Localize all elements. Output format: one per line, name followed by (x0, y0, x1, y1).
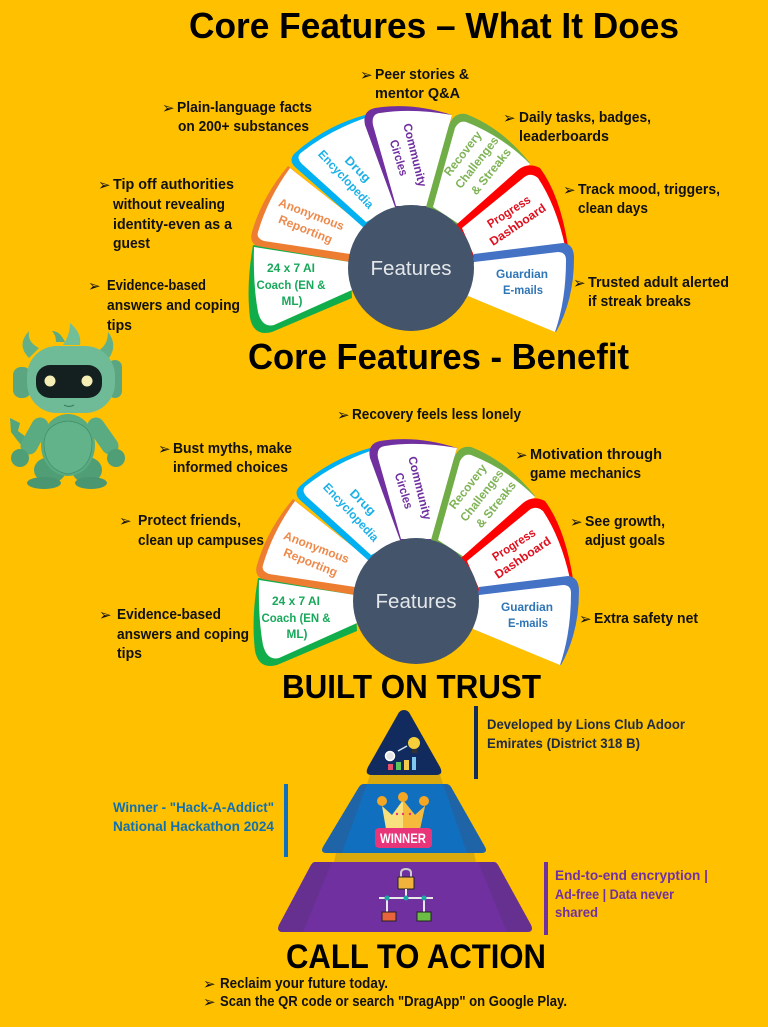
trust note: privacy: Ad-free | Data never (555, 887, 675, 902)
segment: recovery challenges and streaks (431, 447, 535, 559)
callout: anonymous reporting (119, 512, 264, 549)
callout: guardian e-mails (573, 274, 729, 310)
icon: winner crown: WINNER (380, 830, 426, 846)
segment: progress dashboard (456, 165, 568, 262)
icon: green robot mascot (10, 323, 125, 489)
segment: drug encyclopedia (296, 448, 401, 561)
callout: AI coach: Evidence-based (117, 607, 221, 623)
callout: progress dashboard: ➢ (563, 181, 576, 199)
icon: padlock network (379, 869, 433, 921)
segment: recovery challenges and streaks: Recovery (441, 128, 485, 179)
segment: anonymous reporting: Anonymous (277, 195, 346, 233)
segment: guardian e-mails (473, 576, 579, 665)
icon: idea chart (386, 737, 420, 770)
hub circle: features: Features (376, 591, 456, 613)
call to action list: ➢ (203, 993, 216, 1011)
callout: progress dashboard: adjust goals (585, 533, 665, 549)
callout: drug encyclopedia: ➢ (162, 99, 175, 117)
callout: progress dashboard (563, 181, 720, 217)
segment: anonymous reporting (251, 166, 366, 262)
callout: AI coach: tips (107, 318, 132, 334)
callout: AI coach (99, 606, 249, 662)
segment: anonymous reporting (256, 499, 371, 595)
callout: community circles: Recovery feels less lonely (352, 407, 521, 423)
segment: 24x7 AI coach (249, 245, 352, 333)
segment: drug encyclopedia: Encyclopedia (320, 480, 382, 545)
trust note: developer: Developed by Lions Club Adoor (487, 717, 686, 732)
callout: anonymous reporting: ➢ (98, 176, 111, 194)
trust note: hackathon winner: Winner - "Hack-A-Addict" (113, 800, 274, 815)
fan diagram: features (249, 106, 574, 333)
pyramid (278, 710, 532, 932)
segment: community circles: Community (400, 122, 430, 189)
segment: 24x7 AI coach: Coach (EN & (262, 611, 331, 625)
callout: anonymous reporting: without revealing (112, 197, 225, 213)
callout: community circles: ➢ (360, 66, 373, 84)
segment: 24x7 AI coach (254, 578, 357, 666)
trust note: developer (474, 706, 686, 779)
segment: guardian e-mails: Guardian (501, 600, 553, 614)
callout: drug encyclopedia: Plain-language facts (177, 100, 312, 116)
heading: benefits: Core Features - Benefit (248, 336, 629, 377)
callout: anonymous reporting: Protect friends, (138, 513, 241, 529)
segment: community circles (369, 439, 457, 540)
callout: anonymous reporting: guest (113, 236, 150, 252)
segment: progress dashboard: Dashboard (492, 534, 554, 582)
callout: AI coach: answers and coping (117, 627, 249, 643)
segment: 24x7 AI coach: 24 x 7 AI (267, 261, 315, 275)
fan diagram: benefits (254, 439, 579, 666)
callout: AI coach: Evidence-based (107, 278, 206, 294)
callout: recovery challenges (515, 446, 662, 482)
trust note: hackathon winner (113, 784, 288, 857)
hub circle: features (348, 205, 474, 331)
call to action list (203, 975, 567, 1011)
callout: AI coach: answers and coping (107, 298, 240, 314)
icon: winner crown (375, 792, 432, 848)
segment: 24x7 AI coach: 24 x 7 AI (272, 594, 320, 608)
callout: progress dashboard: ➢ (570, 513, 583, 531)
callout: recovery challenges: game mechanics (530, 466, 641, 482)
callout: drug encyclopedia: on 200+ substances (178, 119, 309, 135)
callout: progress dashboard: clean days (578, 201, 648, 217)
callout: community circles: mentor Q&A (375, 86, 461, 102)
callout: drug encyclopedia: ➢ (158, 440, 171, 458)
trust note: privacy: shared (555, 905, 598, 920)
call to action list: ➢ (203, 975, 216, 993)
pyramid tier: top (367, 710, 441, 775)
callout: anonymous reporting: clean up campuses (138, 533, 264, 549)
callout: community circles (360, 66, 469, 102)
segment: 24x7 AI coach: Coach (EN & (256, 278, 326, 292)
callout: progress dashboard: See growth, (585, 514, 665, 530)
call to action list: Reclaim your future today. (220, 976, 388, 992)
callout: AI coach (88, 277, 240, 334)
segment: guardian e-mails: E-mails (508, 616, 548, 630)
call to action list: Scan the QR code or search "DragApp" on Google Play. (220, 994, 567, 1010)
callout: guardian e-mails: ➢ (573, 274, 586, 292)
segment: 24x7 AI coach: ML) (282, 294, 302, 308)
segment: recovery challenges and streaks: Challenges (452, 134, 502, 191)
segment: 24x7 AI coach: ML) (286, 627, 308, 641)
shadow strips (334, 775, 476, 862)
callout: community circles: Peer stories & (375, 67, 469, 83)
callout: recovery challenges: Motivation through (530, 447, 662, 463)
callout: anonymous reporting (98, 176, 234, 252)
callout: recovery challenges: ➢ (515, 446, 528, 464)
callout: recovery challenges (503, 109, 651, 145)
segment: drug encyclopedia (292, 115, 396, 228)
segment: anonymous reporting: Reporting (276, 212, 335, 246)
segment: guardian e-mails: E-mails (503, 283, 543, 297)
callout: drug encyclopedia: informed choices (173, 460, 288, 476)
trust note: privacy (544, 862, 708, 935)
tail (10, 418, 30, 452)
segment: progress dashboard: Dashboard (487, 201, 549, 249)
segment: guardian e-mails (468, 243, 574, 332)
segment: drug encyclopedia: Encyclopedia (315, 147, 377, 212)
segment: guardian e-mails: Guardian (496, 267, 548, 281)
segment: recovery challenges and streaks: Recovery (446, 461, 490, 512)
callout: drug encyclopedia (158, 440, 292, 476)
segment: community circles: Circles (387, 138, 411, 178)
heading: built on trust: BUILT ON TRUST (282, 668, 541, 705)
callout: AI coach: ➢ (99, 606, 112, 624)
callout: guardian e-mails: Trusted adult alerted (588, 275, 729, 291)
title: Core Features – What It Does (189, 5, 679, 46)
segment: community circles: Community (405, 455, 435, 522)
segment: recovery challenges and streaks (426, 114, 530, 226)
callout: community circles: ➢ (337, 406, 350, 424)
segment: drug encyclopedia: Drug (347, 486, 379, 518)
pyramid tier: security (278, 862, 532, 932)
callout: progress dashboard (570, 513, 665, 549)
segment: community circles (364, 106, 452, 207)
callout: progress dashboard: Track mood, triggers, (578, 182, 720, 198)
trust note: developer: Emirates (District 318 B) (487, 736, 640, 751)
hub circle: features (353, 538, 479, 664)
callout: drug encyclopedia: Bust myths, make (173, 441, 292, 457)
callout: guardian e-mails: ➢ (579, 610, 592, 628)
trust note: hackathon winner: National Hackathon 2024 (113, 819, 274, 834)
segment: progress dashboard: Progress (484, 192, 533, 231)
segment: anonymous reporting: Reporting (281, 545, 340, 579)
callout: AI coach: ➢ (88, 277, 101, 295)
callout: drug encyclopedia (162, 99, 312, 135)
callout: recovery challenges: Daily tasks, badges, (519, 110, 651, 126)
segment: progress dashboard: Progress (489, 525, 538, 564)
heading: call to action: CALL TO ACTION (286, 938, 546, 976)
segment: recovery challenges and streaks: & Streaks (473, 478, 519, 531)
segment: progress dashboard (461, 498, 573, 595)
callout: AI coach: tips (117, 646, 142, 662)
callout: anonymous reporting: Tip off authorities (113, 177, 234, 193)
segment: recovery challenges and streaks: & Streaks (468, 145, 514, 198)
segment: recovery challenges and streaks: Challenges (457, 467, 507, 524)
segment: community circles: Circles (392, 471, 416, 511)
feature descriptions (88, 66, 729, 334)
callout: anonymous reporting: identity-even as a (113, 217, 233, 233)
pyramid tier: winner (322, 784, 486, 853)
callout: guardian e-mails: Extra safety net (594, 611, 698, 627)
callout: anonymous reporting: ➢ (119, 512, 132, 530)
segment: anonymous reporting: Anonymous (282, 528, 351, 566)
callout: recovery challenges: leaderboards (519, 129, 609, 145)
trust note: privacy: End-to-end encryption | (555, 868, 708, 883)
hub circle: features: Features (370, 258, 452, 280)
benefit descriptions (99, 406, 698, 662)
callout: recovery challenges: ➢ (503, 109, 516, 127)
segment: drug encyclopedia: Drug (342, 153, 374, 185)
callout: guardian e-mails: if streak breaks (588, 294, 691, 310)
